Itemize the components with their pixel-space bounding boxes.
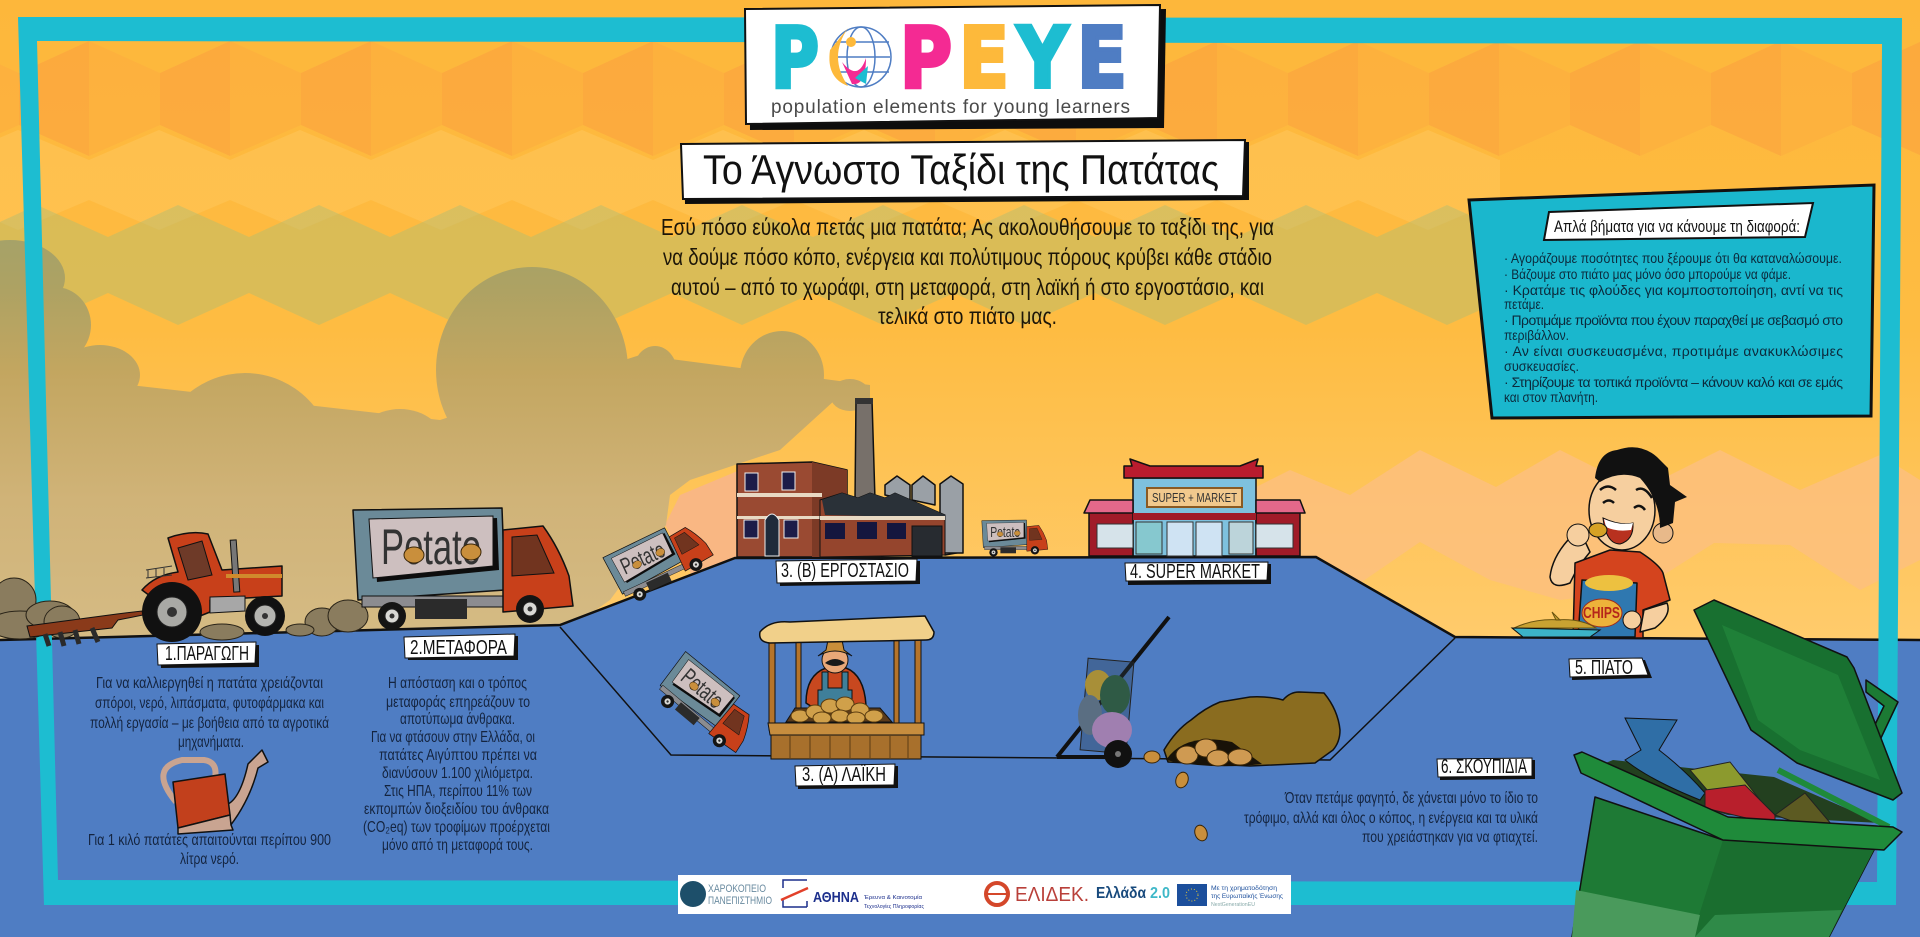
shop sign (1147, 488, 1242, 507)
text: transport: μεταφοράς επηρεάζουν το (386, 694, 530, 711)
label: 1 production (157, 642, 259, 668)
chips bag: CHIPS (1583, 605, 1620, 622)
panel list: συσκευασίες. (1504, 358, 1579, 374)
logo: Athena: ΑΘΗΝΑ (813, 889, 859, 906)
ground (0, 557, 1920, 937)
dirt clouds (0, 578, 368, 640)
text: transport (363, 675, 550, 854)
fries on plate (1512, 612, 1600, 637)
text: waste: Όταν πετάμε φαγητό, δε χάνεται μόνο το ίδιο το (1284, 790, 1538, 807)
title banner: Το Άγνωστο Ταξίδι της Πατάτας (703, 146, 1219, 193)
logo: Athena: Τεχνολογίες Πληροφορίας (864, 904, 925, 910)
text: waste: τρόφιμο, αλλά και όλος ο κόπος, η ενέργεια και τα υλικά (1244, 810, 1538, 827)
label: 3b factory (776, 559, 920, 586)
panel list: · Κρατάμε τις φλούδες για κομποστοποίηση, αντί να τις (1504, 282, 1843, 298)
logo: Harokopio: ΠΑΝΕΠΙΣΤΗΜΙΟ (708, 895, 772, 907)
tractor (142, 533, 285, 642)
logo: Harokopio: ΧΑΡΟΚΟΠΕΙΟ (708, 883, 766, 895)
text: production: σπόροι, νερό, λιπάσματα, φυτοφάρμακα και (95, 695, 324, 712)
logo: EU funding: της Ευρωπαϊκής Ένωσης (1211, 893, 1283, 900)
logo: EU funding: NextGenerationEU (1211, 902, 1255, 908)
truck climbing (603, 514, 718, 608)
panel heading: Απλά βήματα για να κάνουμε τη διαφορά: (1554, 217, 1800, 236)
logo letters: P (771, 9, 819, 107)
text: transport: (CO₂eq) των τροφίμων προέρχεται (363, 819, 550, 836)
panel list: · Στηρίζουμε τα τοπικά προϊόντα – κάνουν καλό και σε εμάς (1504, 374, 1843, 390)
title banner (681, 140, 1249, 204)
panel list (1504, 250, 1843, 405)
text: production (90, 675, 329, 751)
logo: Greece 2.0: Ελλάδα (1096, 885, 1146, 902)
text: transport: εκπομπών διοξειδίου του άνθρακα (364, 801, 549, 818)
logo: Harokopio (680, 881, 772, 907)
partner logos strip (678, 875, 1291, 914)
shopping trolley (1057, 617, 1169, 768)
panel list: περιβάλλον. (1504, 327, 1569, 343)
ground outline (0, 557, 1920, 760)
truck climbing: Potato (616, 536, 669, 579)
potato sack (1164, 692, 1340, 766)
watering can (163, 750, 268, 834)
logo: Greece 2.0: 2.0 (1150, 885, 1170, 902)
wheelie bin (1572, 600, 1902, 937)
label: 6 waste (1437, 756, 1535, 780)
smoke clouds (0, 240, 870, 645)
peach zigzag sky (1230, 450, 1920, 640)
logo letters: E (959, 9, 1009, 107)
bin trash (1625, 718, 1832, 835)
potatoes on stall (791, 697, 883, 724)
intro text: Εσύ πόσο εύκολα πετάς μια πατάτα; Ας ακολουθήσουμε το ταξίδι της, για (661, 214, 1274, 240)
text: transport: Στις ΗΠΑ, περίπου 11% των (384, 783, 532, 800)
big truck (353, 508, 573, 630)
farmer (806, 638, 866, 712)
truck descending (649, 651, 765, 761)
text: production: μηχανήματα. (178, 734, 244, 751)
chips bag (1578, 575, 1637, 637)
supermarket (1084, 459, 1305, 556)
logo letters: Y (1016, 9, 1069, 107)
panel list: · Αν είναι συσκευασμένα, προτιμάμε ανακυκλώσιμες (1504, 343, 1843, 359)
logo letters (771, 9, 1127, 107)
intro text: αυτού – από το χωράφι, στη μεταφορά, στη λαϊκή ή στο εργοστάσιο, και (671, 274, 1264, 300)
panel list: · Βάζουμε στο πιάτο μας μόνο όσο μπορούμε να φάμε. (1504, 266, 1791, 282)
label: 3a street market: 3. (Α) ΛΑΪΚΗ (802, 764, 886, 786)
factory (737, 398, 963, 557)
text: waste (1244, 790, 1538, 846)
hexagon pattern (0, 41, 1920, 325)
logo globe (829, 27, 891, 87)
label: 4 supermarket: 4. SUPER MARKET (1130, 561, 1260, 583)
intro text: να δούμε πόσο κόπο, ενέργεια και πολύτιμους πόρους κρύβει κάθε στάδιο (663, 244, 1272, 270)
text: transport: Για να φτάσουν στην Ελλάδα, οι (371, 729, 535, 746)
panel list: · Αγοράζουμε ποσότητες που ξέρουμε ότι θα καταναλώσουμε. (1504, 250, 1842, 266)
logo letters: E (1077, 9, 1127, 107)
logo: EU funding (1177, 884, 1283, 908)
text: transport: Η απόσταση και ο τρόπος (388, 675, 527, 692)
text: waste: που χρειάστηκαν για να φτιαχτεί. (1362, 829, 1538, 846)
label: 2 transport: 2.ΜΕΤΑΦΟΡΑ (410, 637, 508, 659)
intro text: τελικά στο πιάτο μας. (878, 303, 1057, 329)
text: transport: αποτύπωμα άνθρακα. (400, 711, 515, 728)
logo: Athena: Έρευνα & Καινοτομία (863, 895, 922, 901)
logo: ELIDEK (986, 883, 1089, 906)
shop sign: SUPER + MARKET (1152, 490, 1237, 505)
intro text (661, 214, 1274, 329)
text: production: πολλή εργασία – με βοήθεια από τα αγροτικά (90, 715, 329, 732)
logo tagline: population elements for young learners (771, 97, 1130, 118)
truck descending: Potato (676, 663, 729, 713)
text: production: Για να καλλιεργηθεί η πατάτα χρειάζονται (96, 675, 323, 692)
market stall (760, 616, 934, 759)
label: 3b factory: 3. (Β) ΕΡΓΟΣΤΑΣΙΟ (781, 560, 909, 582)
text: transport: πατάτες Αιγύπτου πρέπει να (379, 747, 537, 764)
label: 6 waste: 6. ΣΚΟΥΠΙΔΙΑ (1441, 756, 1527, 778)
panel list: και στον πλανήτη. (1504, 389, 1598, 405)
text: transport: μόνο από τη μεταφορά τους. (382, 837, 533, 854)
text: transport: διανύσουν 1.100 χιλιόμετρα. (382, 765, 533, 782)
text: water needed: λίτρα νερό. (180, 851, 239, 868)
text: water needed (88, 832, 331, 868)
label: 1 production: 1.ΠΑΡΑΓΩΓΗ (165, 643, 249, 665)
truck on plateau (982, 520, 1048, 557)
big truck: Potato (381, 519, 481, 575)
logo: ELIDEK: ΕΛΙΔΕΚ. (1015, 884, 1089, 906)
logo letters: P (900, 9, 952, 107)
plough (27, 611, 143, 646)
panel: simple steps (1469, 185, 1874, 418)
fallen potatoes (1144, 751, 1209, 843)
text: water needed: Για 1 κιλό πατάτες απαιτούνται περίπου 900 (88, 832, 331, 849)
logo: EU funding: Με τη χρηματοδότηση (1211, 884, 1277, 892)
logo card (745, 5, 1166, 130)
panel heading (1544, 203, 1813, 240)
logo: Athena (781, 880, 925, 910)
label: 5 plate: 5. ΠΙΑΤΟ (1575, 657, 1633, 679)
peach sky behind factory (665, 470, 800, 590)
panel list: · Προτιμάμε προϊόντα που έχουν παραχθεί με σεβασμό στο (1504, 312, 1843, 328)
truck on plateau: Potato (990, 524, 1020, 541)
panel list: πετάμε. (1504, 296, 1544, 312)
boy with chips (1512, 447, 1687, 638)
